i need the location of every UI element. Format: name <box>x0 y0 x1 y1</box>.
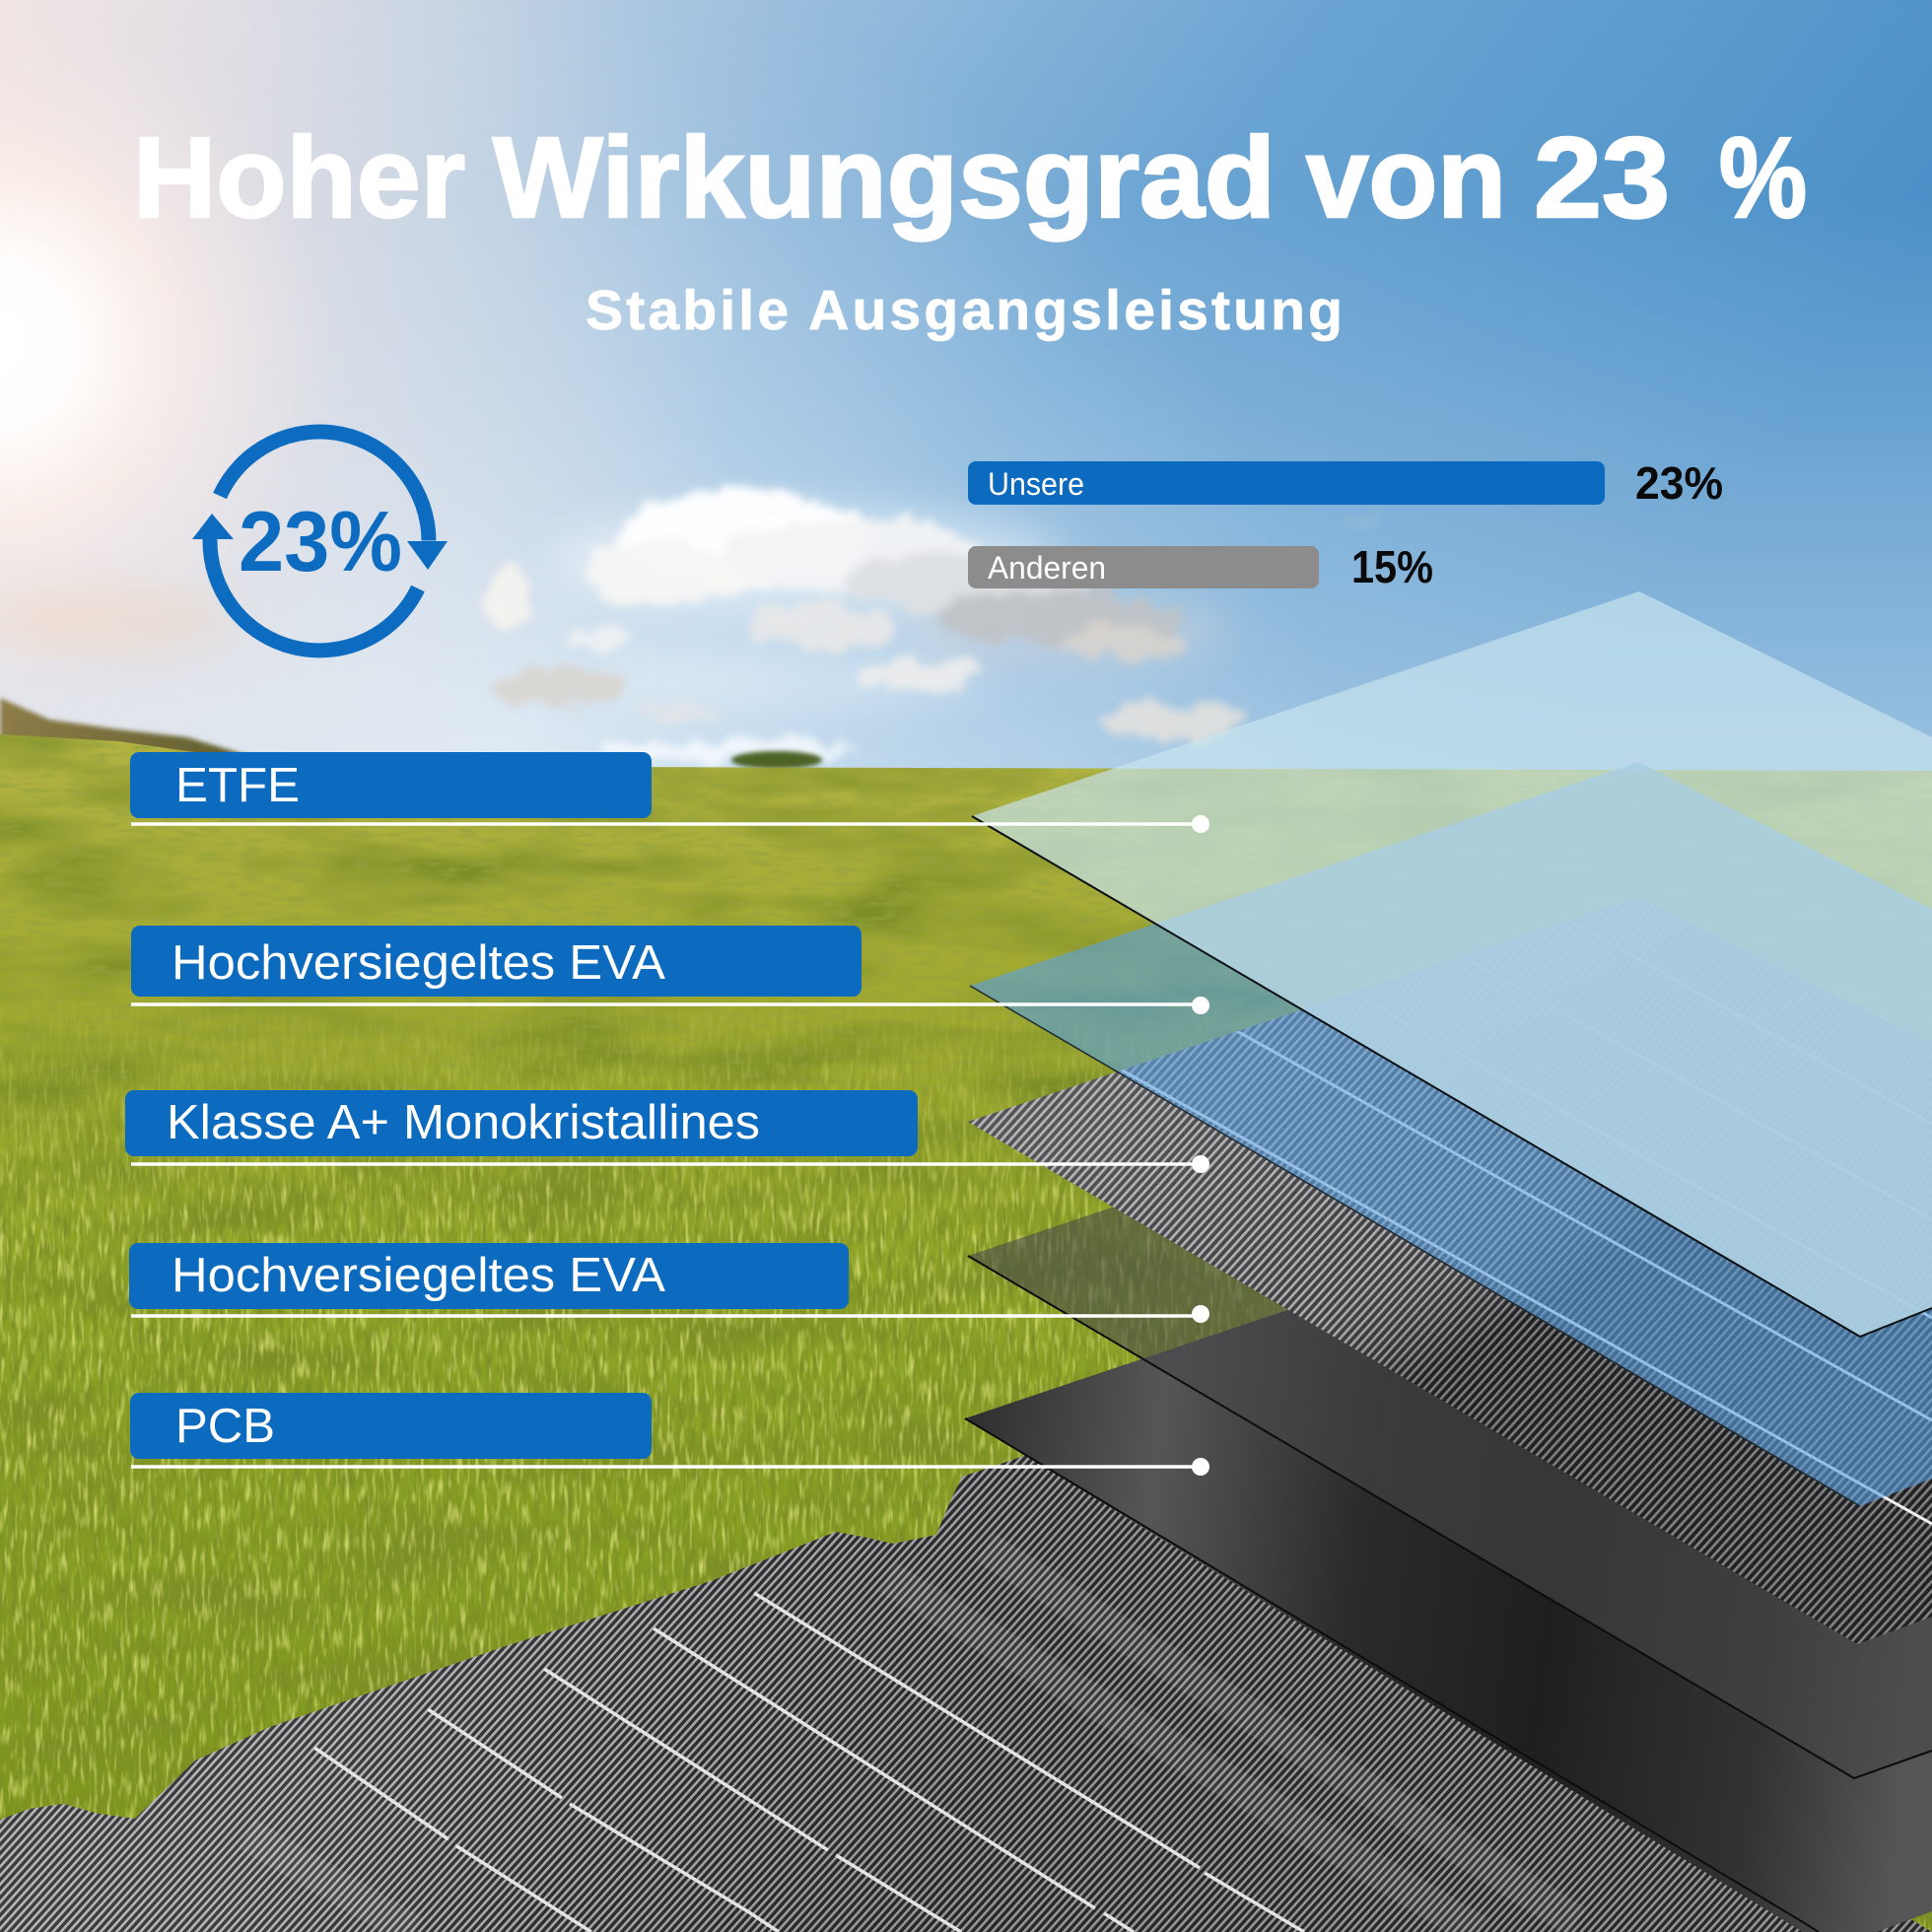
clouds <box>484 488 1419 763</box>
comparison bar: Unsere 23% <box>968 457 1723 509</box>
panel busbars <box>314 1593 1304 1932</box>
faint light bands <box>246 1548 1577 1932</box>
cloud haze <box>0 508 1232 710</box>
icon: 23% efficiency cycle: 23% <box>239 495 402 589</box>
title: Hoher <box>133 113 465 242</box>
label: ETFE: ETFE <box>175 759 300 812</box>
layer: monocrystalline cell sheet <box>968 1009 1932 1644</box>
title: % <box>1719 113 1807 242</box>
layer: ETFE sheet <box>972 591 1932 1337</box>
layer: upper EVA sheet <box>970 762 1932 1506</box>
label: ETFE <box>130 752 1209 833</box>
comparison bar: Anderen 15%: Anderen <box>988 550 1106 586</box>
subtitle: Stabile Ausgangsleistung <box>586 279 1343 342</box>
solar panel base with torn edge <box>0 1449 1932 1932</box>
label: Hochversiegeltes EVA (upper): Hochversiegeltes EVA <box>172 936 665 990</box>
title: von <box>1306 113 1506 242</box>
label: PCB <box>130 1393 1209 1476</box>
comparison bar: Anderen 15% <box>968 541 1433 592</box>
layer: PCB sheet <box>965 1193 1932 1932</box>
label: Klasse A+ Monokristallines <box>125 1090 1209 1173</box>
icon: 23% efficiency cycle <box>192 432 448 651</box>
label: Hochversiegeltes EVA (upper) <box>131 926 1209 1014</box>
treeline on hill <box>0 698 822 769</box>
title: 23 <box>1534 113 1670 242</box>
title: Wirkungsgrad <box>493 113 1276 242</box>
label: Klasse A+ Monokristallines: Klasse A+ Monokristallines <box>167 1096 760 1149</box>
cell busbars <box>1120 1031 1932 1526</box>
sky background <box>0 0 1932 789</box>
grass meadow <box>0 729 1932 1932</box>
layer: lower EVA sheet <box>968 1031 1932 1778</box>
comparison bar: Anderen 15%: 15% <box>1351 541 1433 592</box>
title <box>133 113 1807 242</box>
comparison bar: Unsere 23%: Unsere <box>988 466 1084 502</box>
label: Hochversiegeltes EVA (lower) <box>129 1243 1209 1323</box>
comparison bar: Unsere 23%: 23% <box>1635 457 1723 509</box>
label: Hochversiegeltes EVA (lower): Hochversiegeltes EVA <box>172 1249 665 1302</box>
label: PCB: PCB <box>175 1400 275 1453</box>
